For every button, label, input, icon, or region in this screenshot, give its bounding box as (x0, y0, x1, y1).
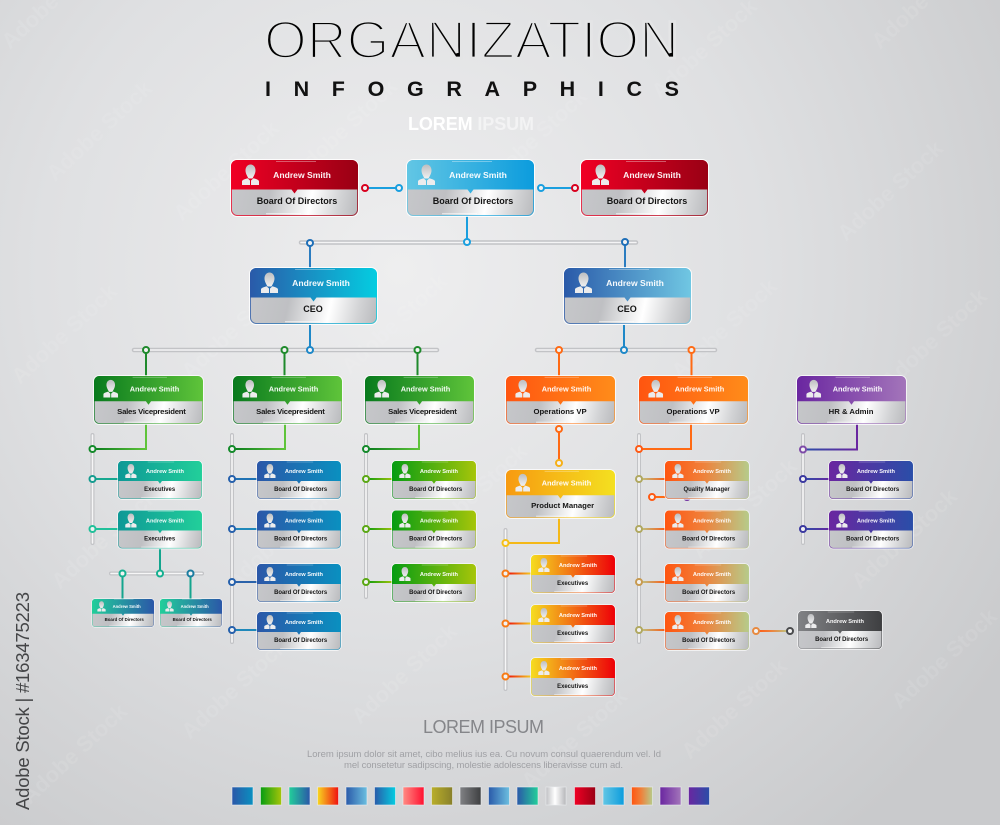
card: purple Board Of Directors two: Andrew Smith (857, 519, 895, 525)
card: Board Of Directors red right (580, 159, 709, 217)
watermark pattern: Adobe Stock (346, 618, 462, 729)
card: Sales Vicepresident two: Andrew Smith (269, 384, 319, 393)
watermark pattern: Adobe Stock (168, 115, 284, 226)
card: Executives yellow red two: Andrew Smith (559, 613, 597, 619)
card: blue Board Of Directors four: Board Of Directors (274, 638, 328, 644)
card: Executives yellow red one (530, 554, 616, 594)
card: Executives yellow red three: Executives (557, 684, 589, 690)
card: Operations VP one (505, 375, 616, 425)
card: Executives yellow red one: Andrew Smith (559, 563, 597, 569)
card: orange Board Of Directors three: Andrew Smith (693, 620, 731, 626)
card: green Board Of Directors one (391, 460, 477, 500)
card: Executives teal one: Executives (144, 487, 176, 493)
card: Operations VP one: Andrew Smith (542, 384, 592, 393)
card: tiny Board Of Directors left: Andrew Smith (113, 604, 141, 609)
card: green Board Of Directors one: Board Of Directors (409, 487, 463, 493)
card: Quality Manager (664, 460, 750, 500)
card: green Board Of Directors three: Board Of Directors (409, 590, 463, 596)
card: CEO right: Andrew Smith (606, 278, 664, 288)
card: tiny Board Of Directors right: Andrew Smith (181, 604, 209, 609)
card: orange Board Of Directors one (664, 510, 750, 549)
card: HR and Admin (796, 375, 907, 425)
connector: sales branch one (90, 424, 194, 600)
card: Quality Manager: Quality Manager (684, 487, 730, 493)
watermark pattern: Adobe Stock (6, 278, 122, 389)
card: blue Board Of Directors two: Board Of Directors (274, 536, 328, 542)
card: HR and Admin: Andrew Smith (833, 384, 883, 393)
card: CEO right: CEO (617, 304, 637, 314)
heading: LOREM IPSUM top: LOREM IPSUM (408, 114, 534, 134)
watermark pattern: Adobe Stock (176, 633, 292, 744)
card: blue Board Of Directors one: Board Of Directors (274, 487, 328, 493)
text block: description (307, 749, 661, 771)
text block: description: Lorem ipsum dolor sit amet, cibo melius ius ea. Cu novum consul quaerendum vel. Id (307, 749, 661, 760)
card: grey Board Of Directors (797, 610, 883, 650)
card: CEO left: CEO (303, 304, 323, 314)
card: blue Board Of Directors four (256, 611, 342, 651)
watermark pattern: Adobe Stock (676, 653, 792, 764)
card: orange Board Of Directors two: Andrew Smith (693, 572, 731, 578)
watermark pattern: Adobe Stock (686, 453, 802, 564)
card: orange Board Of Directors three (664, 611, 750, 651)
card: purple Board Of Directors two (828, 510, 914, 549)
card: Executives teal two (117, 510, 203, 549)
watermark pattern: Adobe Stock (476, 83, 592, 194)
card: Sales Vicepresident three (364, 375, 475, 425)
card: Product Manager (505, 469, 616, 519)
watermark pattern: Adobe Stock (221, 483, 337, 594)
card: purple Board Of Directors one: Andrew Smith (857, 469, 895, 475)
card: Sales Vicepresident three: Sales Vicepresident (388, 407, 457, 416)
card: tiny Board Of Directors right (160, 598, 222, 628)
connector: sales branch three (363, 424, 419, 585)
watermark pattern: Adobe Stock (176, 273, 292, 384)
card: tiny Board Of Directors left (92, 598, 154, 628)
card: Sales Vicepresident two (232, 375, 343, 425)
connector: operations branch two (636, 424, 793, 634)
card: purple Board Of Directors two: Board Of Directors (846, 536, 900, 542)
card: Quality Manager: Andrew Smith (693, 469, 731, 475)
card: orange Board Of Directors three: Board Of Directors (682, 638, 736, 644)
connector: operations branch one (502, 426, 562, 680)
card: CEO right (563, 267, 692, 325)
watermark pattern: Adobe Stock (286, 73, 402, 184)
card: Product Manager: Andrew Smith (542, 478, 592, 487)
card: Executives teal one: Andrew Smith (146, 469, 184, 475)
card: Sales Vicepresident three: Andrew Smith (401, 384, 451, 393)
card: Board Of Directors red right: Board Of Directors (607, 196, 687, 206)
card: orange Board Of Directors one: Andrew Smith (693, 519, 731, 525)
card: blue Board Of Directors two: Andrew Smith (285, 519, 323, 525)
connector: sales branch two (229, 424, 285, 633)
text block: description: mel consetetur sadipscing, molestie adolescens liberavisse cum ad. (344, 760, 623, 771)
watermark pattern: Adobe Stock (416, 438, 532, 549)
card: Executives teal two: Executives (144, 536, 176, 542)
connector: HR branch (800, 424, 857, 532)
subtitle: INFOGRAPHICS: INFOGRAPHICS (265, 77, 679, 101)
card: Executives yellow red two: Executives (557, 631, 589, 637)
card: blue Board Of Directors three: Andrew Smith (285, 572, 323, 578)
card: Sales Vicepresident one: Sales Vicepresident (117, 407, 186, 416)
card: blue Board Of Directors three: Board Of Directors (274, 590, 328, 596)
card: grey Board Of Directors: Andrew Smith (826, 619, 864, 625)
watermark pattern: Adobe Stock (886, 603, 1000, 714)
colour palette swatches (232, 787, 710, 805)
card: orange Board Of Directors two (664, 563, 750, 603)
card: blue Board Of Directors four: Andrew Smith (285, 620, 323, 626)
card: green Board Of Directors three: Andrew Smith (420, 572, 458, 578)
card: Board Of Directors blue centre: Andrew Smith (449, 170, 507, 180)
card: Executives teal two: Andrew Smith (146, 519, 184, 525)
card: Operations VP two (638, 375, 749, 425)
card: Sales Vicepresident two: Sales Vicepresident (256, 407, 325, 416)
card: Operations VP two: Andrew Smith (675, 384, 725, 393)
title: ORGANIZATION: ORGANIZATION (264, 11, 679, 70)
card: green Board Of Directors three (391, 563, 477, 603)
card: green Board Of Directors one: Andrew Smith (420, 469, 458, 475)
watermark pattern: Adobe Stock (666, 273, 782, 384)
card: blue Board Of Directors two (256, 510, 342, 549)
card: CEO left: Andrew Smith (292, 278, 350, 288)
card: Executives teal one (117, 460, 203, 500)
card: green Board Of Directors two: Andrew Smith (420, 519, 458, 525)
card: Board Of Directors red left: Board Of Directors (257, 196, 337, 206)
card: Executives yellow red three: Andrew Smith (559, 666, 597, 672)
card: purple Board Of Directors one (828, 460, 914, 500)
card: Operations VP two: Operations VP (666, 407, 720, 416)
watermark pattern: Adobe Stock (336, 268, 452, 379)
card: purple Board Of Directors one: Board Of Directors (846, 487, 900, 493)
card: orange Board Of Directors two: Board Of Directors (682, 590, 736, 596)
watermark pattern: Adobe Stock (41, 75, 157, 186)
card: Sales Vicepresident one (93, 375, 204, 425)
card: blue Board Of Directors three (256, 563, 342, 603)
card: orange Board Of Directors one: Board Of Directors (682, 536, 736, 542)
card: Sales Vicepresident one: Andrew Smith (130, 384, 180, 393)
card: HR and Admin: HR & Admin (829, 407, 874, 416)
card: Product Manager: Product Manager (531, 501, 594, 510)
watermark pattern: Adobe Stock (46, 483, 162, 594)
card: green Board Of Directors two (391, 510, 477, 549)
watermark pattern: Adobe Stock (516, 683, 632, 794)
card: Executives yellow red three (530, 657, 616, 697)
card: blue Board Of Directors one: Andrew Smith (285, 469, 323, 475)
card: Operations VP one: Operations VP (533, 407, 587, 416)
card: Executives yellow red one: Executives (557, 581, 589, 587)
watermark pattern: Adobe Stock (16, 698, 132, 809)
watermark pattern: Adobe Stock (832, 135, 948, 246)
watermark pattern: Adobe Stock (876, 283, 992, 394)
card: CEO left (249, 267, 378, 325)
card: Board Of Directors red left (230, 159, 359, 217)
card: Executives yellow red two (530, 604, 616, 644)
stock credit vertical text: Adobe Stock | #163475223 (12, 592, 33, 810)
connector: board to CEO level (301, 185, 636, 268)
card: green Board Of Directors two: Board Of Directors (409, 536, 463, 542)
card: Board Of Directors red right: Andrew Smith (623, 170, 681, 180)
vertical rails (92, 435, 803, 689)
watermark pattern: Adobe Stock (846, 483, 962, 594)
card: Board Of Directors blue centre (406, 159, 535, 217)
card: Board Of Directors red left: Andrew Smith (273, 170, 331, 180)
card: grey Board Of Directors: Board Of Directors (815, 637, 869, 643)
heading: LOREM IPSUM bottom: LOREM IPSUM (423, 717, 544, 737)
connector: CEO to VP level (134, 325, 715, 376)
card: Board Of Directors blue centre: Board Of Directors (433, 196, 513, 206)
card: tiny Board Of Directors right: Board Of Directors (173, 617, 212, 622)
card: tiny Board Of Directors left: Board Of Directors (105, 617, 144, 622)
card: blue Board Of Directors one (256, 460, 342, 500)
